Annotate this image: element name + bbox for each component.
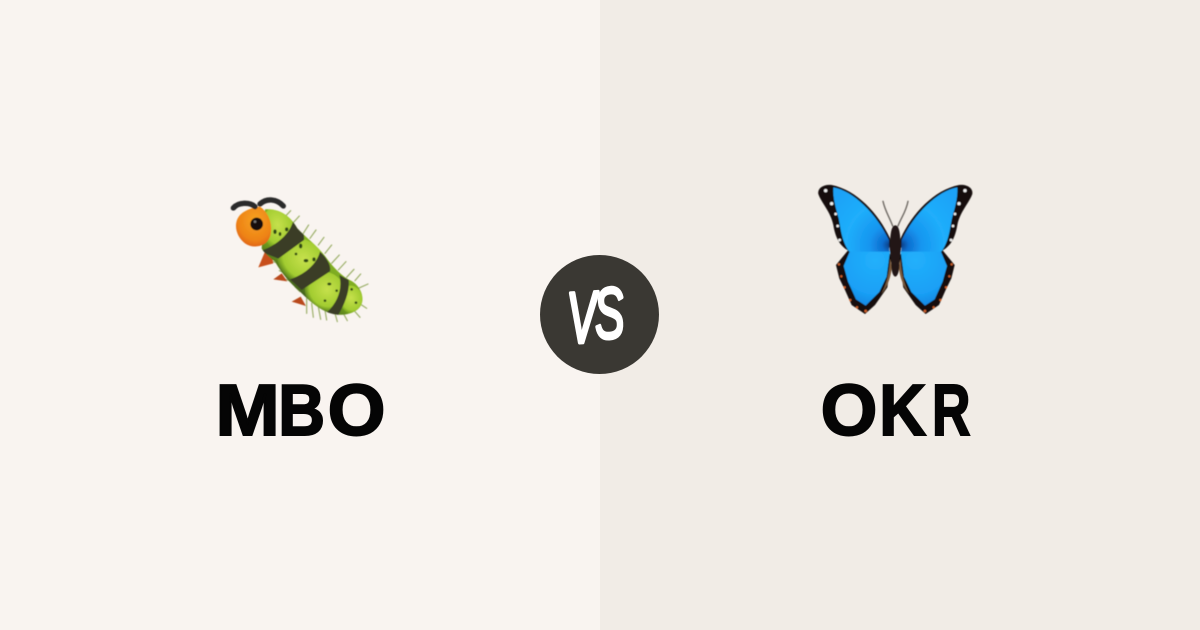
eye bbox=[250, 218, 263, 230]
spikes bbox=[273, 211, 368, 322]
letter S: S bbox=[591, 272, 627, 355]
icon: caterpillar bbox=[233, 200, 368, 322]
fore wing bbox=[818, 185, 892, 251]
label: OKR: K bbox=[879, 370, 926, 451]
label: OKR bbox=[821, 370, 970, 451]
icon: butterfly bbox=[818, 185, 972, 314]
hind wing bbox=[836, 249, 892, 314]
panel: left background bbox=[0, 0, 600, 630]
body bbox=[262, 209, 362, 315]
label: OKR: O bbox=[821, 370, 877, 451]
antennae bbox=[233, 203, 255, 208]
letter V: V bbox=[566, 276, 603, 359]
body segments and bands bbox=[262, 208, 363, 316]
head bbox=[236, 207, 271, 246]
label: MBO bbox=[216, 370, 385, 451]
dark spots bbox=[273, 227, 357, 304]
label: MBO: B bbox=[278, 370, 325, 451]
label: MBO: M bbox=[216, 370, 280, 450]
panel: right background bbox=[600, 0, 1200, 630]
label: OKR: R bbox=[932, 371, 970, 451]
badge circle bbox=[540, 255, 659, 374]
feet bbox=[258, 252, 273, 267]
orange wing dots bbox=[838, 263, 867, 312]
label: MBO: O bbox=[328, 371, 385, 451]
body bbox=[890, 225, 901, 277]
right wings mirrored bbox=[899, 185, 972, 314]
VS badge bbox=[540, 255, 659, 374]
antennae bbox=[883, 201, 908, 226]
left wings bbox=[818, 185, 892, 314]
white wing dots bbox=[824, 189, 841, 241]
